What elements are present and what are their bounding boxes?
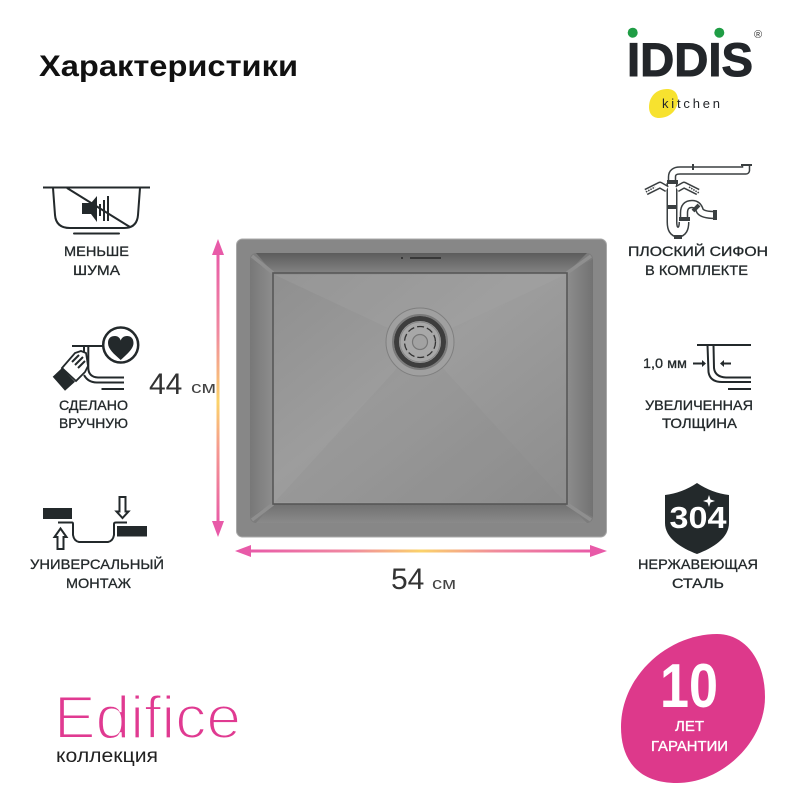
label: МОНТАЖ xyxy=(66,575,131,591)
icon: 304 shield: 304 xyxy=(670,500,727,535)
dimension: height: см xyxy=(191,378,216,397)
dimension: height xyxy=(149,368,216,401)
badge: 10 years warranty: 10 xyxy=(660,652,718,721)
label xyxy=(59,397,128,431)
badge: 10 years warranty: ГАРАНТИИ xyxy=(651,738,728,755)
basin floor xyxy=(273,273,567,504)
dimension: width: 54 xyxy=(391,563,424,596)
sink xyxy=(236,239,606,537)
panel: increased thickness xyxy=(643,345,753,431)
logo: IDDIS kitchen: ® xyxy=(754,29,762,41)
label xyxy=(30,555,164,591)
label: УВЕЛИЧЕННАЯ xyxy=(645,397,753,413)
label: СТАЛЬ xyxy=(672,575,724,591)
badge: 10 years warranty: ЛЕТ xyxy=(675,718,704,735)
collection name xyxy=(54,684,241,767)
icon: mounting xyxy=(43,497,147,549)
arrow: width xyxy=(235,545,607,557)
overflow slot xyxy=(401,257,441,259)
panel: siphon xyxy=(628,164,768,278)
icon: muted sink xyxy=(43,188,150,234)
panel: handmade xyxy=(53,328,138,431)
label: ВРУЧНУЮ xyxy=(59,415,128,431)
logo: IDDIS kitchen: kitchen xyxy=(662,96,720,111)
label: ПЛОСКИЙ СИФОН xyxy=(628,242,768,259)
title: Характеристики xyxy=(39,50,298,83)
label xyxy=(64,243,129,278)
basin walls xyxy=(250,253,593,523)
dimension: height: 44 xyxy=(149,368,182,401)
icon: hand and heart xyxy=(53,328,138,391)
logo: IDDIS kitchen: IDDIS xyxy=(627,33,753,86)
label xyxy=(638,556,758,591)
logo: IDDIS kitchen xyxy=(627,28,762,118)
label: УНИВЕРСАЛЬНЫЙ xyxy=(30,555,164,572)
label xyxy=(645,397,753,431)
icon: thickness: 1,0 мм xyxy=(643,355,687,371)
label xyxy=(628,242,768,278)
arrow: height xyxy=(212,239,224,537)
drain xyxy=(386,308,454,376)
dimension: width: см xyxy=(432,574,456,593)
label: МЕНЬШЕ xyxy=(64,243,129,259)
panel: less noise xyxy=(43,188,150,278)
panel: stainless steel xyxy=(638,483,758,591)
label: НЕРЖАВЕЮЩАЯ xyxy=(638,556,758,572)
panel: universal mounting xyxy=(30,497,164,591)
label: В КОМПЛЕКТЕ xyxy=(645,262,748,278)
label: СДЕЛАНО xyxy=(59,397,128,413)
Edifice: Edifice xyxy=(54,684,241,751)
rim xyxy=(236,239,606,537)
caption: коллекция xyxy=(56,746,158,767)
dimension: width xyxy=(391,563,456,596)
badge: 10 years warranty xyxy=(621,634,765,783)
label: ШУМА xyxy=(73,262,121,278)
label: ТОЛЩИНА xyxy=(662,415,738,431)
icon: siphon xyxy=(646,164,752,237)
